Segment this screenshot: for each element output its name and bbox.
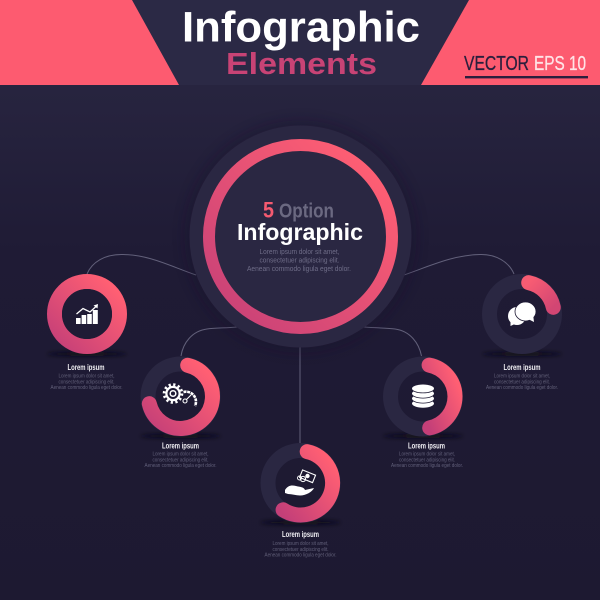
title: Infographic	[182, 4, 420, 52]
label: consectetuer adipiscing elit.	[399, 458, 455, 464]
subtitle: Elements	[226, 46, 377, 81]
label: Lorem ipsum	[408, 442, 445, 450]
icon: hand and banknote	[285, 470, 316, 496]
label: consectetuer adipiscing elit.	[494, 380, 550, 386]
label	[486, 363, 558, 391]
label: Lorem ipsum dolor sit amet,	[58, 374, 114, 380]
label: Lorem ipsum dolor sit amet,	[272, 541, 328, 547]
label: Lorem ipsum	[68, 363, 104, 372]
central body text: consectetuer adipiscing elit.	[260, 258, 340, 264]
label: Aenean commodo ligula eget dolor.	[50, 385, 122, 391]
label: Lorem ipsum dolor sit amet,	[152, 452, 208, 458]
header band	[0, 0, 600, 85]
label: Lorem ipsum	[162, 442, 199, 450]
label: consectetuer adipiscing elit.	[272, 547, 328, 553]
label: consectetuer adipiscing elit.	[152, 458, 208, 464]
label: Aenean commodo ligula eget dolor.	[391, 463, 463, 469]
icon: database stack	[412, 384, 434, 408]
label: Aenean commodo ligula eget dolor.	[144, 463, 216, 469]
node 3: hand with money	[260, 450, 340, 558]
central heading	[237, 198, 363, 245]
label	[264, 530, 336, 558]
node 5: speech bubbles	[482, 282, 562, 391]
central body text: Aenean commodo ligula eget dolor.	[247, 266, 351, 273]
label	[391, 442, 463, 469]
label	[50, 363, 122, 391]
central circle	[184, 120, 416, 352]
label: Aenean commodo ligula eget dolor.	[486, 385, 558, 391]
icon: bar chart	[76, 304, 98, 324]
vector eps badge: EPS 10	[534, 53, 586, 75]
label: Lorem ipsum dolor sit amet,	[494, 374, 550, 380]
node 2: gears	[140, 364, 220, 469]
label: consectetuer adipiscing elit.	[58, 380, 114, 386]
central body text	[247, 249, 351, 273]
label: Lorem ipsum	[282, 530, 319, 539]
central heading: 5	[263, 198, 274, 222]
label: Lorem ipsum dolor sit amet,	[399, 452, 455, 458]
vector eps badge: VECTOR	[464, 53, 529, 75]
icon: chat bubbles	[508, 302, 536, 326]
node 1: growth chart	[47, 282, 127, 391]
label: Aenean commodo ligula eget dolor.	[264, 552, 336, 558]
right pink banner	[421, 0, 600, 85]
left pink banner	[0, 0, 179, 85]
central body text: Lorem ipsum dolor sit amet,	[260, 249, 340, 256]
central heading: Option	[279, 200, 334, 222]
connector lines	[87, 254, 514, 443]
icon: gears and gauge	[164, 385, 196, 406]
node 4: database	[383, 364, 463, 469]
label	[144, 442, 216, 469]
vector eps badge	[464, 53, 588, 78]
label: Lorem ipsum	[504, 363, 540, 372]
central heading: Infographic	[237, 219, 363, 245]
